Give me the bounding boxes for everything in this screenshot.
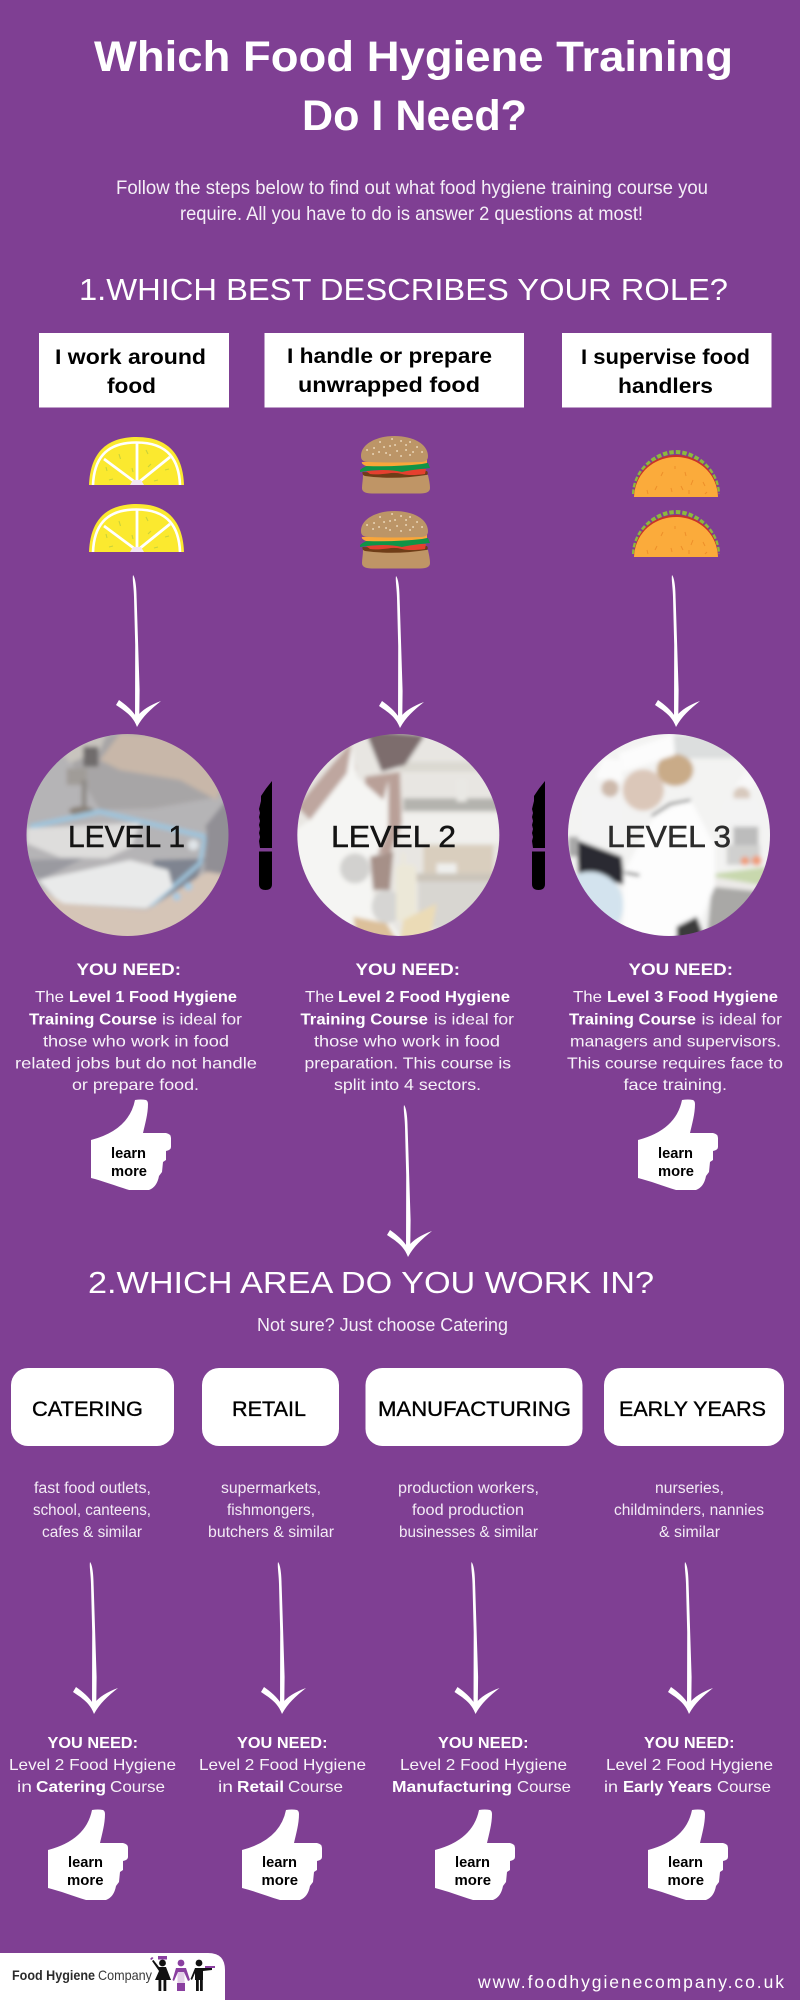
text block: retail examples: supermarkets, bbox=[221, 1480, 321, 1497]
panel: early years bbox=[604, 1368, 784, 1446]
text block: catering examples: cafes & similar bbox=[42, 1524, 142, 1541]
panel: role 3: I supervise food bbox=[581, 345, 750, 369]
photo circle: level 1: LEVEL 1 bbox=[68, 820, 185, 854]
text block: level 1 recommendation: Level 1 Food Hygiene bbox=[69, 989, 237, 1006]
subheading: Not sure? Just choose Catering bbox=[257, 1315, 508, 1335]
panel: catering: CATERING bbox=[32, 1398, 143, 1421]
icon: burgers bbox=[360, 436, 430, 568]
text block: level 3 recommendation: Level 3 Food Hygiene bbox=[607, 989, 778, 1006]
text block: early years course: Course bbox=[717, 1779, 771, 1796]
text block: manufacturing course: Course bbox=[517, 1779, 571, 1796]
title bbox=[94, 33, 733, 140]
thumb button: early years: more bbox=[668, 1872, 704, 1889]
arrow: level 2 to step 2 bbox=[387, 1105, 432, 1257]
heading: step 1: 1.WHICH BEST DESCRIBES YOUR ROLE? bbox=[79, 272, 728, 307]
text block: level 3 recommendation bbox=[567, 960, 783, 1094]
intro text: Follow the steps below to find out what food hygiene training course you bbox=[116, 178, 708, 199]
text block: retail course: Level 2 Food Hygiene bbox=[199, 1757, 366, 1774]
photo circle: level 2: LEVEL 2 bbox=[331, 820, 456, 854]
text block: catering course: YOU NEED: bbox=[48, 1735, 138, 1752]
panel: role 1 bbox=[39, 333, 229, 408]
text block: catering course bbox=[9, 1735, 176, 1796]
text block: early years course: Level 2 Food Hygiene bbox=[606, 1757, 773, 1774]
intro text: require. All you have to do is answer 2 questions at most! bbox=[180, 204, 643, 225]
panel: role 1: food bbox=[107, 374, 156, 398]
thumb button: level 1: learn bbox=[111, 1145, 146, 1162]
icon: tacos bbox=[634, 452, 718, 557]
text block: level 1 recommendation: related jobs but do not handle bbox=[15, 1056, 257, 1072]
text block: manufacturing course bbox=[392, 1735, 571, 1796]
intro text bbox=[116, 178, 708, 225]
text block: level 2 recommendation: Level 2 Food Hygiene bbox=[338, 989, 510, 1006]
panel: role 3: handlers bbox=[618, 374, 713, 398]
arrow: role 1 to level 1 bbox=[116, 575, 161, 727]
icon: lemons bbox=[89, 437, 184, 552]
text block: retail examples: fishmongers, bbox=[227, 1502, 315, 1519]
text block: catering examples: school, canteens, bbox=[33, 1502, 151, 1519]
panel: retail bbox=[202, 1368, 339, 1446]
text block: retail examples bbox=[208, 1480, 334, 1541]
text block: manufacturing course: Level 2 Food Hygiene bbox=[400, 1757, 567, 1774]
text block: retail course bbox=[199, 1735, 366, 1796]
panel: role 2: I handle or prepare bbox=[287, 344, 492, 368]
icon: chef, server and waiter figures bbox=[150, 1956, 215, 1991]
footer logo panel: Company bbox=[98, 1967, 152, 1983]
text block: manufacturing examples bbox=[398, 1480, 539, 1541]
thumb button: retail: learn bbox=[262, 1854, 297, 1871]
text block: level 1 recommendation: The bbox=[35, 989, 64, 1006]
arrow: catering bbox=[73, 1562, 118, 1714]
text block: level 1 recommendation bbox=[15, 960, 257, 1094]
heading: step 2: 2.WHICH AREA DO YOU WORK IN? bbox=[88, 1265, 654, 1300]
arrow: role 2 to level 2 bbox=[379, 576, 424, 728]
text block: early years course: in bbox=[604, 1779, 618, 1796]
arrow: retail bbox=[261, 1562, 306, 1714]
text block: retail course: Retail bbox=[237, 1779, 284, 1796]
text block: level 3 recommendation: YOU NEED: bbox=[628, 960, 733, 979]
text block: catering examples bbox=[33, 1480, 151, 1541]
photo circle: level 1 bbox=[26, 734, 228, 936]
text block: level 1 recommendation: those who work in food bbox=[43, 1034, 229, 1050]
arrow: manufacturing bbox=[454, 1562, 500, 1714]
text block: level 1 recommendation: Training Course bbox=[29, 1012, 157, 1028]
thumb button: level 3 bbox=[638, 1100, 718, 1190]
panel: role 1: I work around bbox=[55, 345, 206, 369]
footer logo panel bbox=[0, 1953, 225, 2000]
icon: knife bbox=[259, 781, 272, 890]
photo circle: level 2 bbox=[297, 734, 500, 936]
text block: manufacturing examples: businesses & similar bbox=[399, 1524, 538, 1541]
text block: level 1 recommendation: or prepare food. bbox=[72, 1077, 199, 1094]
text block: level 2 recommendation: preparation. This course is bbox=[304, 1056, 511, 1072]
thumb button: retail: more bbox=[262, 1872, 298, 1889]
panel: catering bbox=[11, 1368, 174, 1446]
text block: level 1 recommendation: YOU NEED: bbox=[76, 960, 181, 979]
arrow: early years bbox=[668, 1562, 713, 1714]
thumb button: level 1 bbox=[91, 1100, 171, 1190]
text block: level 3 recommendation: This course requires face to bbox=[567, 1056, 783, 1072]
text block: early years examples: nurseries, bbox=[655, 1480, 724, 1497]
text block: manufacturing examples: food production bbox=[412, 1502, 524, 1519]
text block: catering course: in bbox=[17, 1779, 32, 1796]
text block: level 1 recommendation: is ideal for bbox=[162, 1012, 243, 1028]
text block: catering course: Level 2 Food Hygiene bbox=[9, 1757, 176, 1774]
text block: early years course: Early Years bbox=[623, 1779, 712, 1796]
text block: early years examples: & similar bbox=[659, 1524, 720, 1541]
text block: level 2 recommendation: YOU NEED: bbox=[356, 960, 460, 979]
text block: catering examples: fast food outlets, bbox=[34, 1480, 151, 1497]
text block: level 2 recommendation: split into 4 sectors. bbox=[334, 1077, 481, 1094]
text block: level 2 recommendation: those who work in food bbox=[314, 1034, 500, 1050]
panel: role 2: unwrapped food bbox=[298, 373, 480, 397]
text block: retail course: YOU NEED: bbox=[237, 1735, 328, 1752]
text block: early years course: YOU NEED: bbox=[644, 1735, 734, 1752]
text block: level 2 recommendation: Training Course bbox=[300, 1012, 428, 1028]
text block: retail examples: butchers & similar bbox=[208, 1524, 334, 1541]
thumb button: level 3: learn bbox=[658, 1145, 693, 1162]
thumb button: early years bbox=[648, 1810, 728, 1900]
text block: level 3 recommendation: face training. bbox=[624, 1077, 727, 1094]
thumb button: catering: learn bbox=[68, 1854, 103, 1871]
panel: role 2 bbox=[264, 333, 524, 408]
text block: level 3 recommendation: is ideal for bbox=[702, 1012, 783, 1028]
panel: retail: RETAIL bbox=[232, 1398, 306, 1421]
icon: knife bbox=[532, 781, 545, 890]
text block: level 3 recommendation: managers and supervisors. bbox=[570, 1034, 781, 1050]
footer logo panel: Food Hygiene bbox=[12, 1967, 95, 1983]
text block: level 2 recommendation: The bbox=[305, 989, 334, 1006]
photo circle: level 3: LEVEL 3 bbox=[607, 820, 731, 854]
text block: level 3 recommendation: The bbox=[573, 989, 602, 1006]
thumb button: manufacturing: more bbox=[454, 1872, 491, 1889]
text block: manufacturing course: Manufacturing bbox=[392, 1779, 512, 1796]
text block: catering course: Course bbox=[110, 1779, 165, 1796]
thumb button: catering: more bbox=[67, 1872, 104, 1889]
thumb button: retail bbox=[242, 1810, 322, 1900]
text block: retail course: in bbox=[218, 1779, 233, 1796]
thumb button: manufacturing: learn bbox=[455, 1854, 490, 1871]
panel: manufacturing: MANUFACTURING bbox=[378, 1398, 571, 1421]
thumb button: catering bbox=[48, 1810, 128, 1900]
text block: early years examples bbox=[614, 1480, 764, 1541]
title: Do I Need? bbox=[302, 92, 527, 140]
text block: manufacturing course: YOU NEED: bbox=[438, 1735, 528, 1752]
arrow: role 3 to level 3 bbox=[655, 575, 700, 727]
text block: catering course: Catering bbox=[36, 1779, 106, 1796]
text block: manufacturing examples: production workers, bbox=[398, 1480, 539, 1497]
website url: www.foodhygienecompany.co.uk bbox=[477, 1972, 784, 1992]
panel: manufacturing bbox=[366, 1368, 582, 1446]
panel: early years: EARLY YEARS bbox=[619, 1398, 766, 1421]
thumb button: early years: learn bbox=[668, 1854, 703, 1871]
panel: role 3 bbox=[562, 333, 772, 408]
title: Which Food Hygiene Training bbox=[94, 33, 733, 81]
thumb button: level 3: more bbox=[658, 1163, 694, 1180]
text block: level 2 recommendation bbox=[300, 960, 515, 1094]
text block: retail course: Course bbox=[288, 1779, 343, 1796]
thumb button: manufacturing bbox=[435, 1810, 515, 1900]
text block: level 2 recommendation: is ideal for bbox=[434, 1012, 515, 1028]
text block: level 3 recommendation: Training Course bbox=[569, 1012, 696, 1028]
text block: early years examples: childminders, nannies bbox=[614, 1502, 764, 1519]
thumb button: level 1: more bbox=[111, 1163, 147, 1180]
photo circle: level 3 bbox=[568, 734, 770, 936]
text block: early years course bbox=[604, 1735, 773, 1796]
